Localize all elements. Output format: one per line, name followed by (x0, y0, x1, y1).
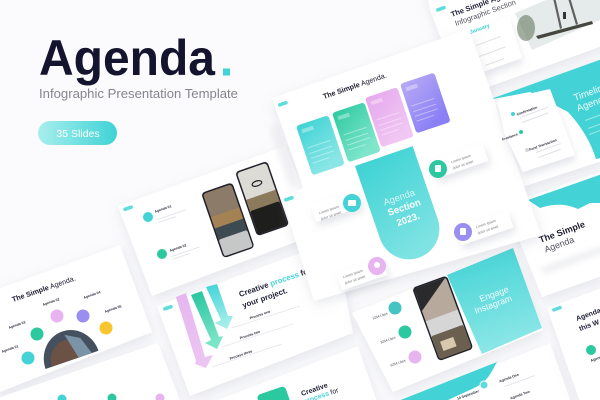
callout: teal (310, 190, 362, 222)
phone 2 (235, 161, 289, 236)
process labels (229, 310, 271, 361)
panel: main agenda slide (270, 29, 541, 301)
button: 35 slides: 35 Slides (56, 128, 100, 140)
callout: green: dolor sit amet (452, 160, 474, 170)
panel: calendar slide: Agenda One (499, 373, 519, 383)
panel: left arc agenda slide (0, 245, 152, 394)
card: January (469, 23, 492, 36)
panel: calendar slide (395, 343, 572, 400)
callout: green (429, 144, 488, 179)
panel: bottom creative slide (205, 346, 378, 400)
panel: bottom creative slide: Creative (300, 382, 329, 398)
section shape: Agenda (382, 187, 417, 208)
callout: teal: dolor sit amet (320, 211, 342, 221)
heading (572, 81, 600, 114)
heading: Creative process for (238, 266, 312, 299)
subtitle: Infographic Presentation Template (39, 86, 238, 101)
panel: instagram slide: 3254 Likes (380, 335, 397, 344)
callout: teal: Lorem ipsum (319, 205, 339, 215)
phone 1 (201, 182, 255, 258)
panel: phones slide: Agenda 01 (154, 204, 172, 214)
timeline card: Freelance (502, 132, 518, 142)
labels (1, 290, 122, 354)
labels: Agenda 02 (42, 297, 60, 307)
panel: weekly agenda slide (547, 287, 600, 400)
labels: Agenda 03 (8, 320, 26, 330)
section shape: Section (386, 197, 423, 219)
timeline card (497, 89, 575, 172)
arrow: pink (176, 293, 213, 368)
process labels: Process one (249, 310, 271, 320)
heading: your project. (241, 286, 289, 310)
callout: pink (336, 257, 388, 290)
panel: lower left slide (0, 343, 182, 400)
panel: instagram slide: 1254 Likes (372, 311, 389, 320)
panel: right agenda slide (505, 170, 600, 297)
panel: instagram slide (352, 248, 543, 392)
panel: right agenda slide: The Simple (538, 219, 586, 245)
labels: Agenda 01 (1, 344, 19, 354)
callout: purple: dolor sit amet (477, 225, 499, 235)
button: 35 slides (38, 121, 117, 145)
arrow: teal (206, 284, 233, 329)
photo (515, 0, 600, 50)
timeline card: Fund Transaction (529, 138, 557, 152)
panel: phones slide: Agenda 02 (169, 243, 187, 253)
panel: left arc agenda slide: The Simple Agenda. (11, 274, 77, 304)
heading: Engage (478, 284, 510, 304)
agenda cards (296, 73, 451, 175)
panel: right agenda slide: Agenda (543, 234, 575, 254)
photo semicircle (36, 322, 98, 369)
panel: instagram slide: 5254 Likes (390, 358, 407, 367)
teal area (447, 248, 542, 354)
panel: weekly agenda slide: this W (578, 319, 600, 333)
labels: Agenda 04 (83, 290, 101, 300)
callout: purple: Lorem ipsum (476, 219, 496, 229)
title: Agenda (39, 30, 216, 86)
icons (22, 310, 112, 364)
section shape (355, 146, 448, 268)
labels: Agenda 05 (104, 304, 122, 314)
heading: Instagram (473, 293, 513, 316)
arrow: green (191, 291, 223, 349)
teal swoosh (488, 58, 600, 159)
card (466, 17, 522, 72)
callout: purple (454, 210, 513, 245)
phone (412, 275, 473, 361)
callout: pink: Lorem ipsum (343, 269, 363, 279)
panel: creative process slide (157, 240, 353, 396)
process labels: Process three (229, 349, 253, 361)
panel: top right slide (425, 0, 600, 96)
panel: timeline slide (469, 58, 600, 187)
heading: The Simple Agenda. (322, 71, 388, 101)
panel: phones slide (118, 146, 322, 296)
section shape: 2023. (395, 211, 421, 229)
circles (388, 302, 422, 364)
process labels: Process two (239, 329, 261, 340)
timeline card: Confirmation (516, 105, 538, 117)
callout: pink: dolor sit amet (344, 275, 366, 285)
callout: green: Lorem ipsum (451, 154, 471, 164)
